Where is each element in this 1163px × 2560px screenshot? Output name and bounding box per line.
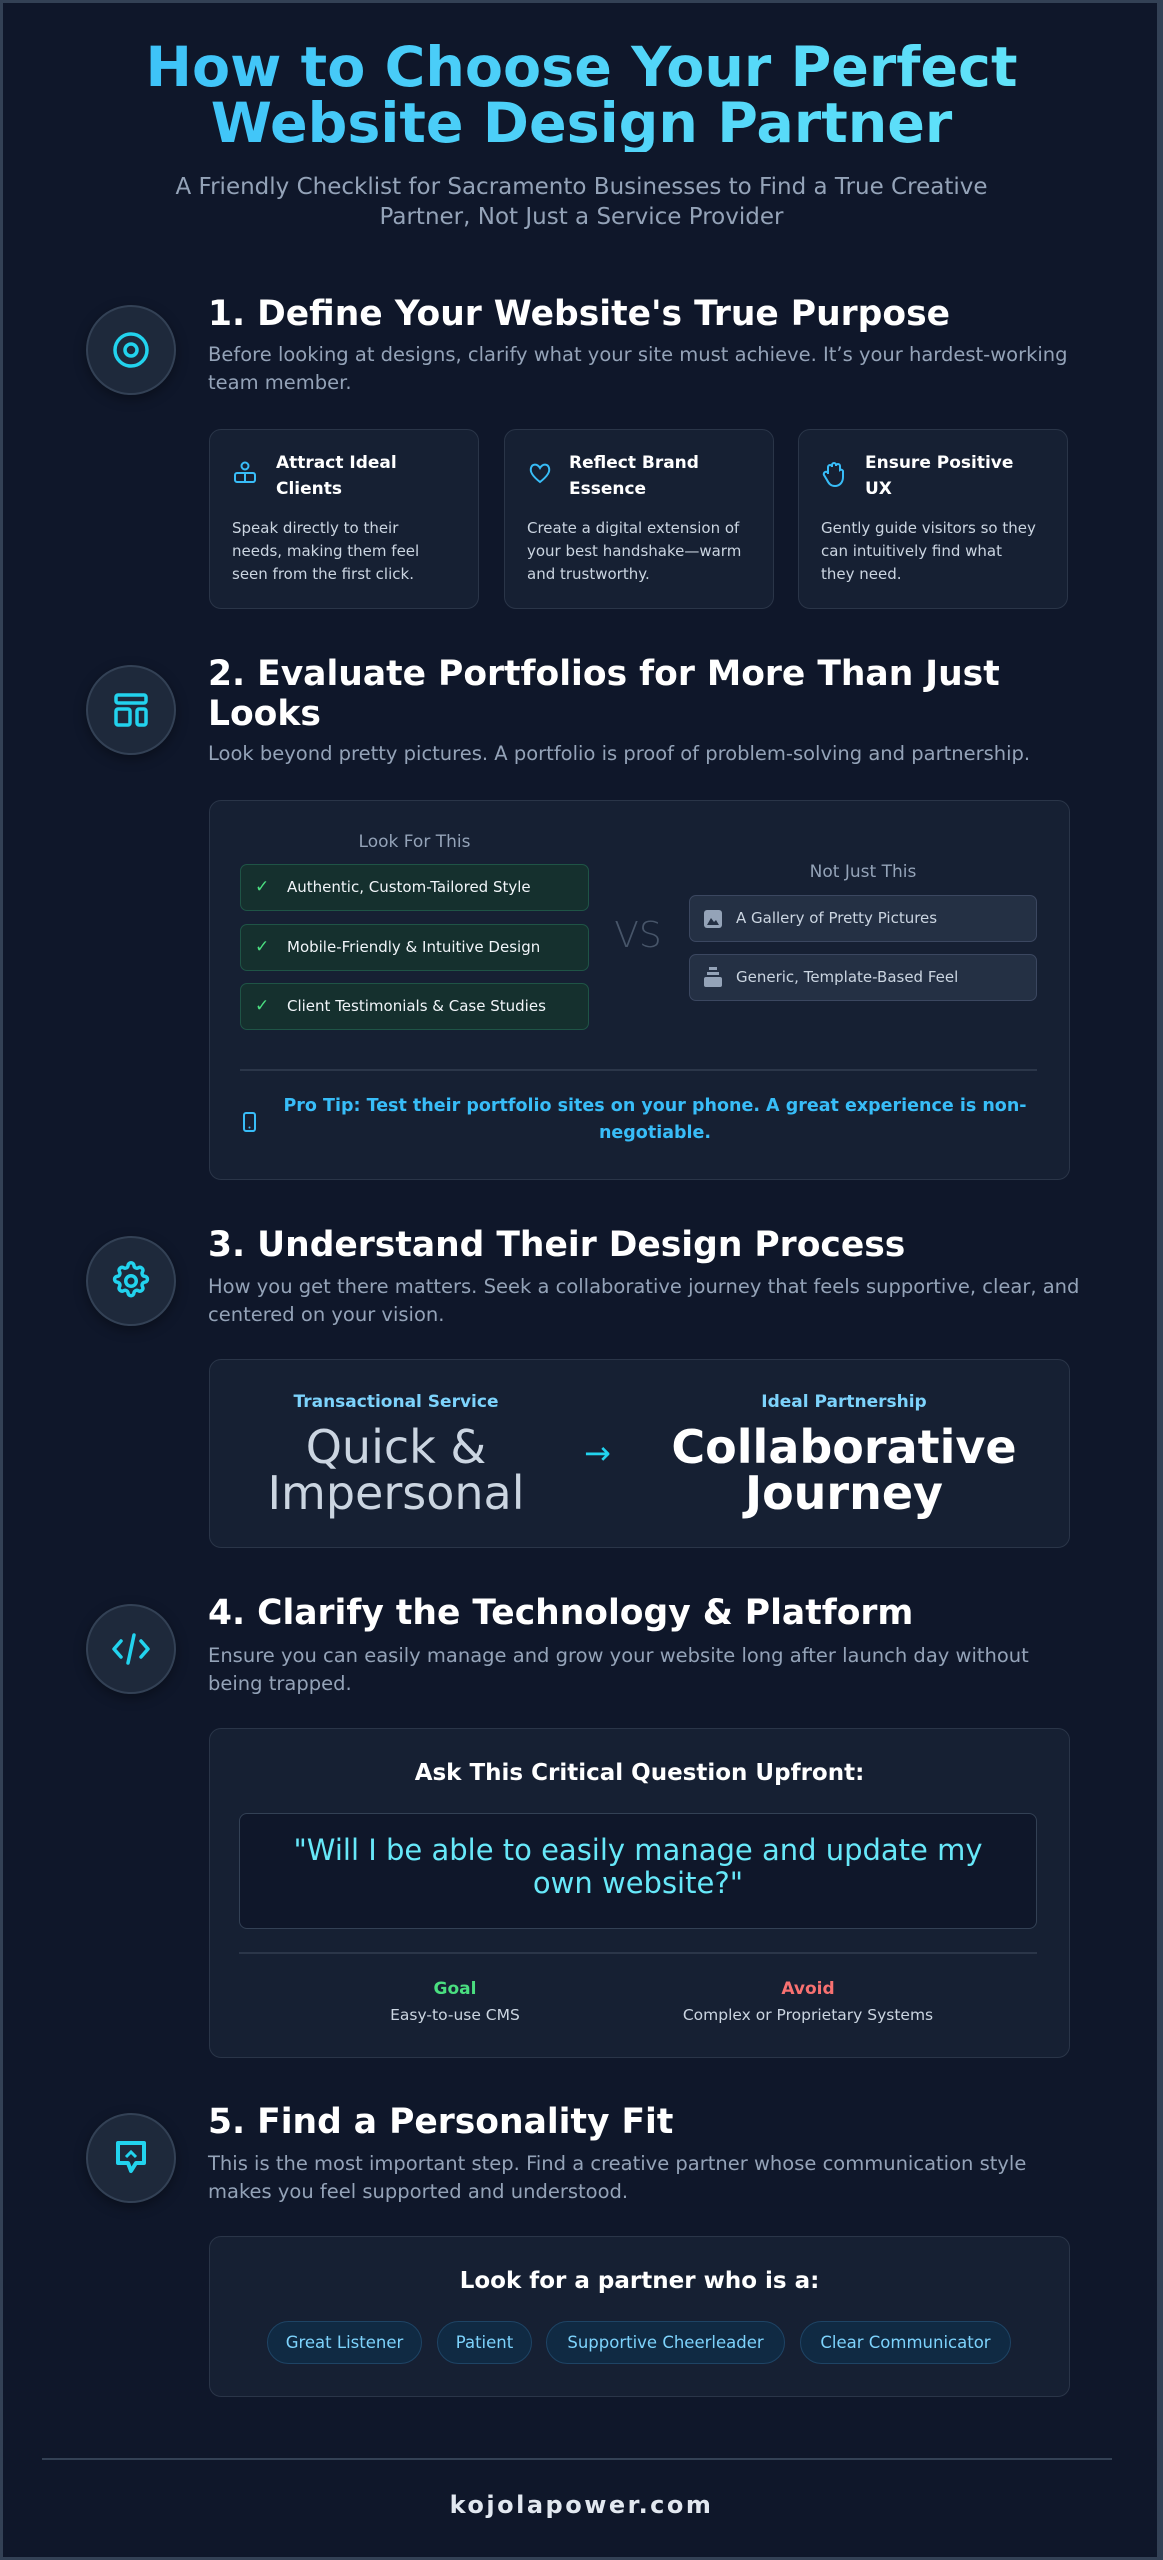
pill: great listener: Great Listener [286, 2333, 403, 2352]
panel: critical question [209, 1728, 1070, 2058]
subtitle: A Friendly Checklist for Sacramento Businesses to Find a True Creative Partner, Not Just a Service Provider [176, 174, 988, 230]
title [0, 40, 1163, 152]
column: ideal partnership: Collaborative [671, 1420, 1017, 1474]
icon: phone [243, 1112, 256, 1132]
item: gallery: A Gallery of Pretty Pictures [736, 909, 937, 927]
column: ideal partnership [671, 1392, 1017, 1520]
pill: clear communicator: Clear Communicator [820, 2333, 991, 2352]
column: transactional: Transactional Service [294, 1392, 498, 1412]
item: authentic style: ✓ [255, 877, 269, 897]
pill: clear communicator [800, 2321, 1011, 2364]
heading: ask this question: Ask This Critical Question Upfront: [415, 1760, 864, 1786]
item: mobile friendly [240, 924, 589, 971]
column: transactional: Quick & [306, 1420, 486, 1474]
text: section 4 description: Ensure you can easily manage and grow your website long after launch day without being trapped. [208, 1644, 1029, 1695]
item: mobile friendly: ✓ [255, 937, 269, 957]
pill: great listener [267, 2321, 422, 2364]
icon: layout (section 2) [86, 665, 176, 755]
column: transactional [267, 1392, 525, 1520]
icon: heart [530, 464, 550, 484]
heading: section 1: 1. Define Your Website's True Purpose [208, 294, 950, 334]
card: attract ideal clients: needs, making them feel [232, 542, 419, 560]
heading: section 4: 4. Clarify the Technology & Platform [208, 1593, 913, 1633]
card: ensure positive UX: Gently guide visitors so they [821, 519, 1036, 537]
column: ideal partnership: Ideal Partnership [761, 1392, 927, 1412]
text: section 3 description: How you get there matters. Seek a collaborative journey that feels supportive, clear, and centered on your vision. [208, 1275, 1079, 1326]
arrow: → [584, 1434, 611, 1472]
quote box: "Will I be able to easily manage and update my own website?" [293, 1833, 983, 1900]
pill: patient: Patient [456, 2333, 513, 2352]
item: mobile friendly: Mobile-Friendly & Intuitive Design [287, 938, 540, 956]
card: attract ideal clients: seen from the first click. [232, 565, 414, 583]
pill: patient [437, 2321, 532, 2364]
card: attract ideal clients: Attract Ideal Clients [276, 453, 397, 499]
pill: supportive cheerleader [546, 2321, 785, 2364]
panel: process comparison [209, 1359, 1070, 1548]
goal: Goal [434, 1979, 476, 1999]
item: testimonials [240, 983, 589, 1030]
avoid: Avoid [781, 1979, 835, 1999]
item: gallery [689, 895, 1037, 942]
heading: section 5: 5. Find a Personality Fit [208, 2102, 673, 2142]
card: ensure positive UX: can intuitively find what [821, 542, 1002, 560]
text: section 1 description: Before looking at designs, clarify what your site must achieve. It’s your hardest-working team member. [208, 343, 1068, 394]
text: section 2 description: Look beyond pretty pictures. A portfolio is proof of problem-solving and partnership. [208, 742, 1030, 765]
card: reflect brand essence: your best handshake—warm [527, 542, 741, 560]
item: authentic style [240, 864, 589, 911]
column: transactional: Impersonal [267, 1466, 525, 1520]
card: ensure positive UX: Ensure Positive UX [865, 453, 1013, 499]
title: Website Design Partner [211, 91, 952, 156]
label: not just this: Not Just This [810, 862, 916, 882]
column: ideal partnership: Journey [745, 1466, 943, 1520]
panel: personality traits [209, 2236, 1070, 2397]
icon: target (section 1) [86, 305, 176, 395]
avoid [683, 1979, 933, 2024]
pill: supportive cheerleader: Supportive Cheerleader [567, 2333, 764, 2352]
panel: portfolio comparison [209, 800, 1070, 1180]
icon: hand [822, 462, 844, 487]
card: attract ideal clients: Speak directly to their [232, 519, 398, 537]
avoid: Complex or Proprietary Systems [683, 2006, 933, 2024]
heading: look for a partner: Look for a partner who is a: [460, 2268, 819, 2294]
item: template: Generic, Template-Based Feel [736, 968, 958, 986]
item: testimonials: ✓ [255, 996, 269, 1016]
quote box [239, 1813, 1037, 1929]
title: How to Choose Your Perfect [146, 35, 1017, 100]
card: ensure positive UX: they need. [821, 565, 902, 583]
text: VS: VS [614, 915, 662, 956]
label: look for this: Look For This [359, 832, 470, 852]
icon: gear (section 3) [86, 1236, 176, 1326]
item: testimonials: Client Testimonials & Case Studies [287, 997, 546, 1015]
item: template [689, 954, 1037, 1001]
card: attract ideal clients [209, 429, 479, 609]
icon: people [234, 462, 256, 483]
card: reflect brand essence: and trustworthy. [527, 565, 650, 583]
card: ensure positive UX [798, 429, 1068, 609]
heading: section 2: 2. Evaluate Portfolios for More Than Just Looks [208, 654, 1000, 734]
card: reflect brand essence: Create a digital extension of [527, 519, 739, 537]
goal [390, 1979, 520, 2024]
card: reflect brand essence: Reflect Brand Essence [569, 453, 699, 499]
card: reflect brand essence [504, 429, 774, 609]
icon: chat (section 5) [86, 2113, 176, 2203]
footer: website: kojolapower.com [450, 2491, 713, 2519]
text: section 5 description: This is the most important step. Find a creative partner whose communication style makes you feel supported and understood. [208, 2152, 1026, 2203]
item: authentic style: Authentic, Custom-Tailored Style [287, 878, 531, 896]
goal: Easy-to-use CMS [390, 2006, 520, 2024]
icon: code (section 4) [86, 1604, 176, 1694]
text: pro tip: Pro Tip: Test their portfolio sites on your phone. A great experience is non-negotiable. [283, 1096, 1027, 1143]
heading: section 3: 3. Understand Their Design Process [208, 1225, 905, 1265]
